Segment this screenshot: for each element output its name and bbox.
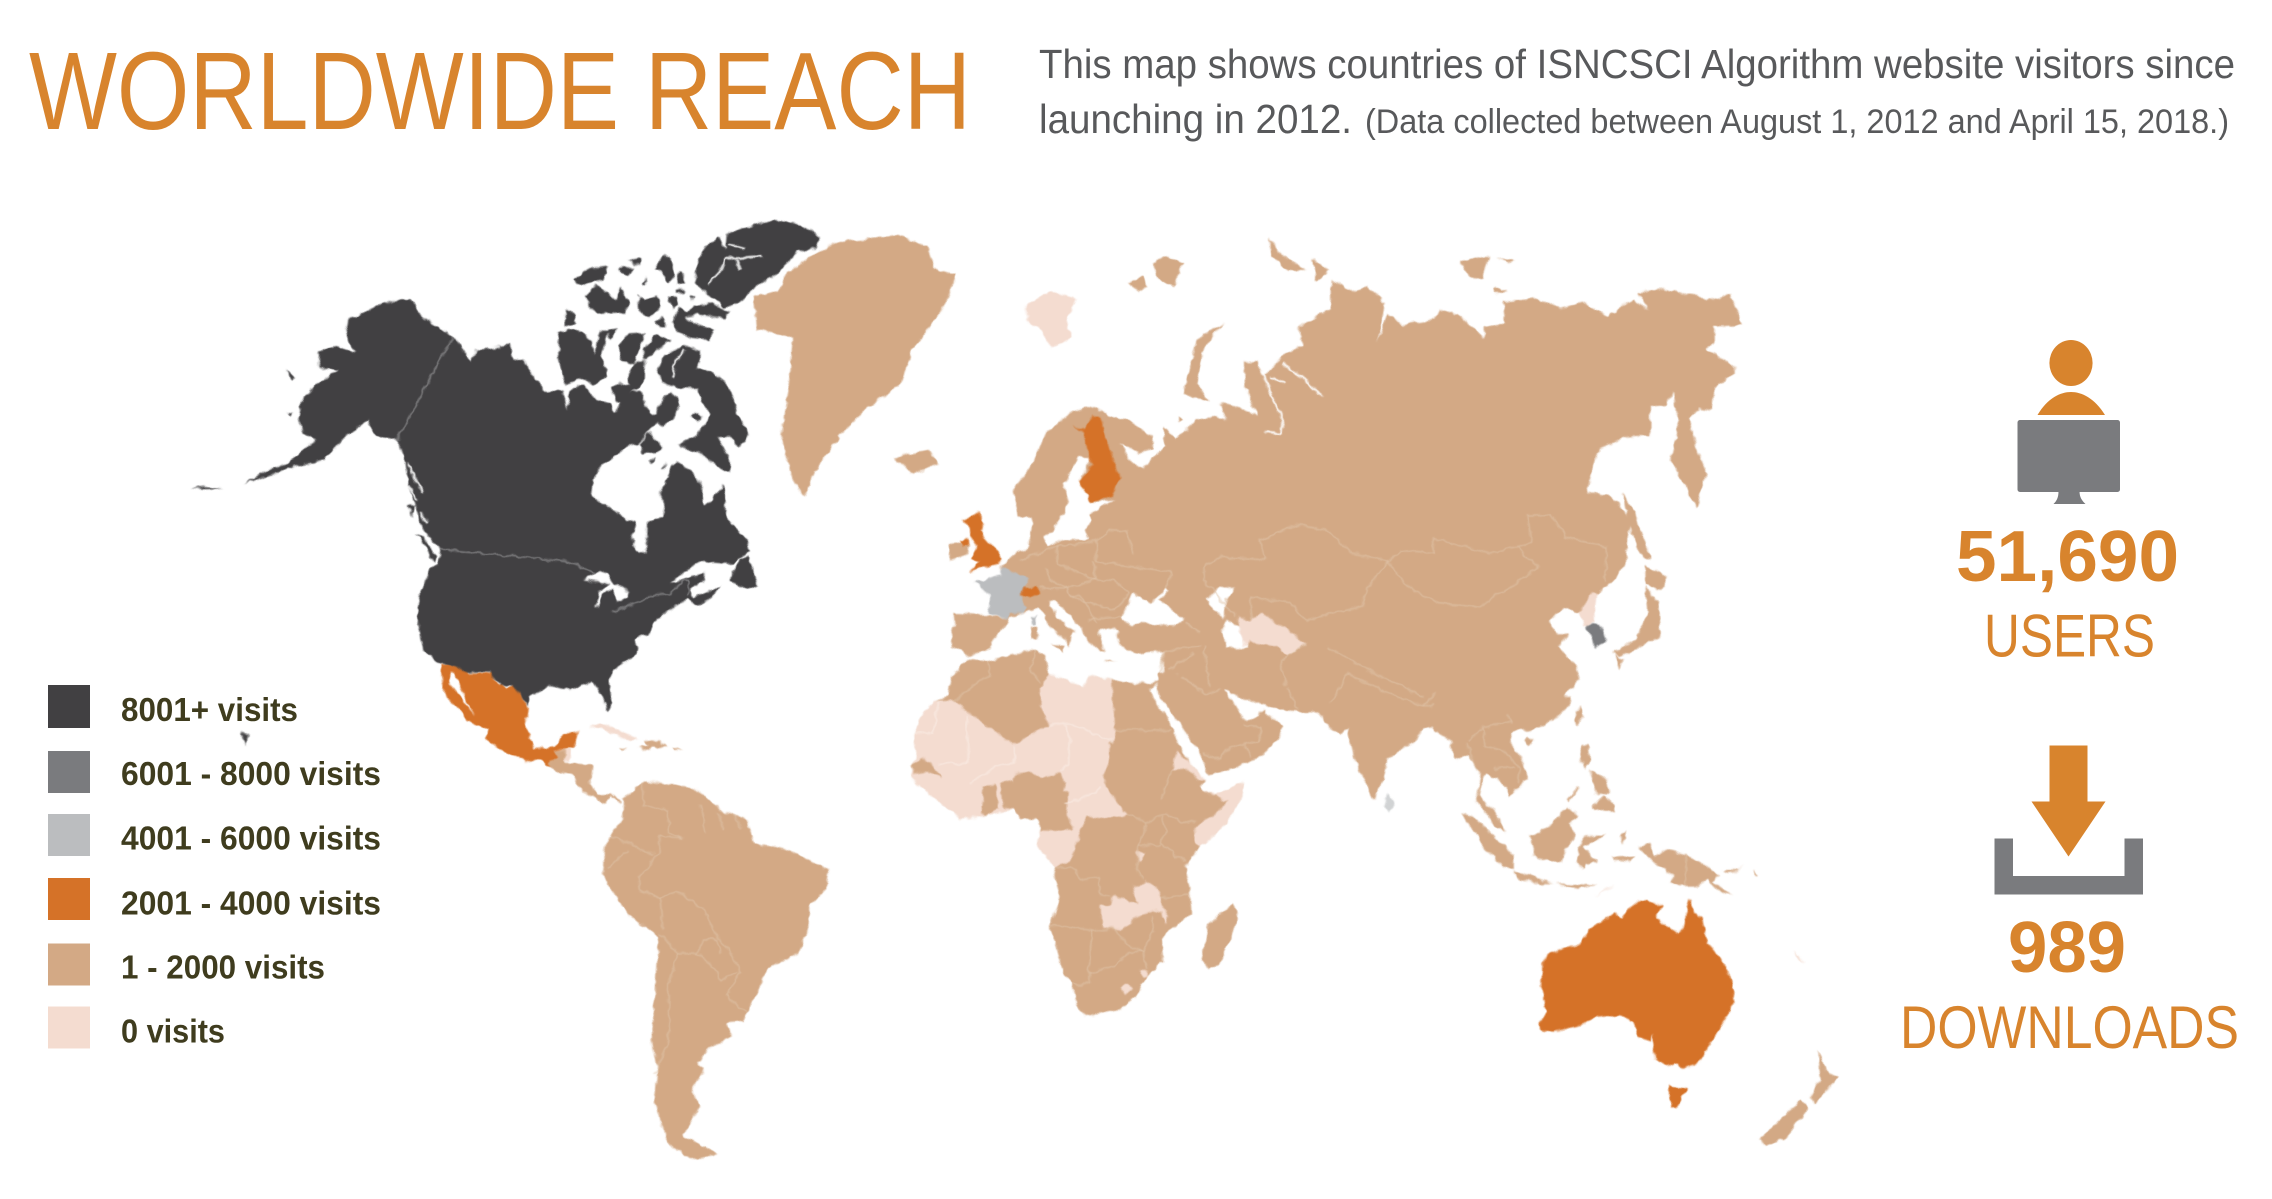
North Korea	[1579, 592, 1597, 627]
map: North America	[191, 299, 750, 712]
island: Sakhalin and Japan	[1612, 493, 1668, 670]
legend labels: 0 visits	[121, 1012, 225, 1050]
legend labels	[121, 691, 381, 1050]
Mediterranean islands	[1031, 617, 1117, 661]
intro text: (Data collected between August 1, 2012 and April 15, 2018.)	[1365, 103, 2229, 141]
islands: Alaska and Pacific coast	[191, 370, 437, 563]
United Kingdom	[960, 512, 1002, 573]
Caspian Sea	[1207, 587, 1247, 648]
legend labels: 6001 - 8000 visits	[121, 755, 381, 792]
border: Canada and USA west	[440, 549, 520, 557]
users label: USERS	[1984, 602, 2155, 670]
legend labels: 8001+ visits	[121, 691, 298, 728]
France	[974, 567, 1028, 618]
borders: Asia	[1168, 515, 1607, 697]
legend labels: 2001 - 4000 visits	[121, 884, 381, 922]
map: South America	[603, 781, 828, 1159]
map: Hawaii	[242, 733, 248, 746]
map: Southeast Asia and Oceania	[1433, 697, 1804, 1070]
border: Alaska	[397, 338, 452, 440]
map: South Asia	[1223, 640, 1838, 1146]
map: Greenland	[753, 235, 956, 497]
river gulfs	[1260, 363, 1321, 433]
Svalbard	[1026, 292, 1077, 348]
map: Hudson Bay area islands, lakes and borders	[520, 412, 758, 612]
map: Mexico and Central America	[440, 665, 682, 803]
New Zealand	[1760, 1049, 1838, 1146]
intro text	[1039, 41, 2235, 142]
map: Canadian Arctic islands	[558, 220, 820, 477]
icon: download	[1994, 746, 2143, 894]
Spain	[952, 613, 1008, 656]
Switzerland	[1020, 587, 1039, 597]
world map	[191, 220, 1838, 1159]
fjords	[408, 347, 501, 523]
Finland	[1072, 417, 1120, 503]
Tasmania	[1669, 1085, 1688, 1107]
intro text: launching in 2012.	[1039, 96, 1352, 142]
map: Iceland	[894, 449, 939, 474]
Indonesia, Philippines, New Guinea	[1462, 707, 1758, 895]
Ireland	[950, 542, 970, 562]
Black Sea	[1120, 588, 1185, 626]
map: Eurasia north	[1013, 238, 1742, 700]
legend labels: 4001 - 6000 visits	[121, 820, 381, 856]
legend swatches	[48, 685, 90, 1048]
Eurasia overlays: Caspian, Finland, Korea, Turkmenistan	[1072, 363, 1607, 697]
users count: 51,690	[1956, 517, 2179, 597]
borders: Africa	[913, 650, 1195, 985]
islands: Caribbean	[588, 723, 638, 741]
map: Africa	[911, 650, 1243, 1017]
legend labels: 1 - 2000 visits	[121, 948, 325, 986]
arctic islands	[1128, 238, 1514, 423]
legend	[48, 685, 381, 1050]
island: Madagascar	[1202, 902, 1238, 968]
Sri Lanka	[1384, 792, 1394, 812]
title: WORLDWIDE REACH	[29, 30, 971, 153]
downloads count: 989	[2008, 908, 2126, 988]
icon: user at computer	[2018, 340, 2120, 504]
map: Europe	[950, 500, 1200, 693]
pale: no-visit countries	[912, 673, 1243, 995]
South Korea	[1587, 623, 1607, 648]
tan: West African countries	[911, 757, 1073, 831]
borders: Europe	[1020, 530, 1200, 693]
map: Arabia	[1157, 673, 1283, 777]
Turkmenistan	[1237, 613, 1306, 655]
Australia	[1540, 898, 1733, 1070]
